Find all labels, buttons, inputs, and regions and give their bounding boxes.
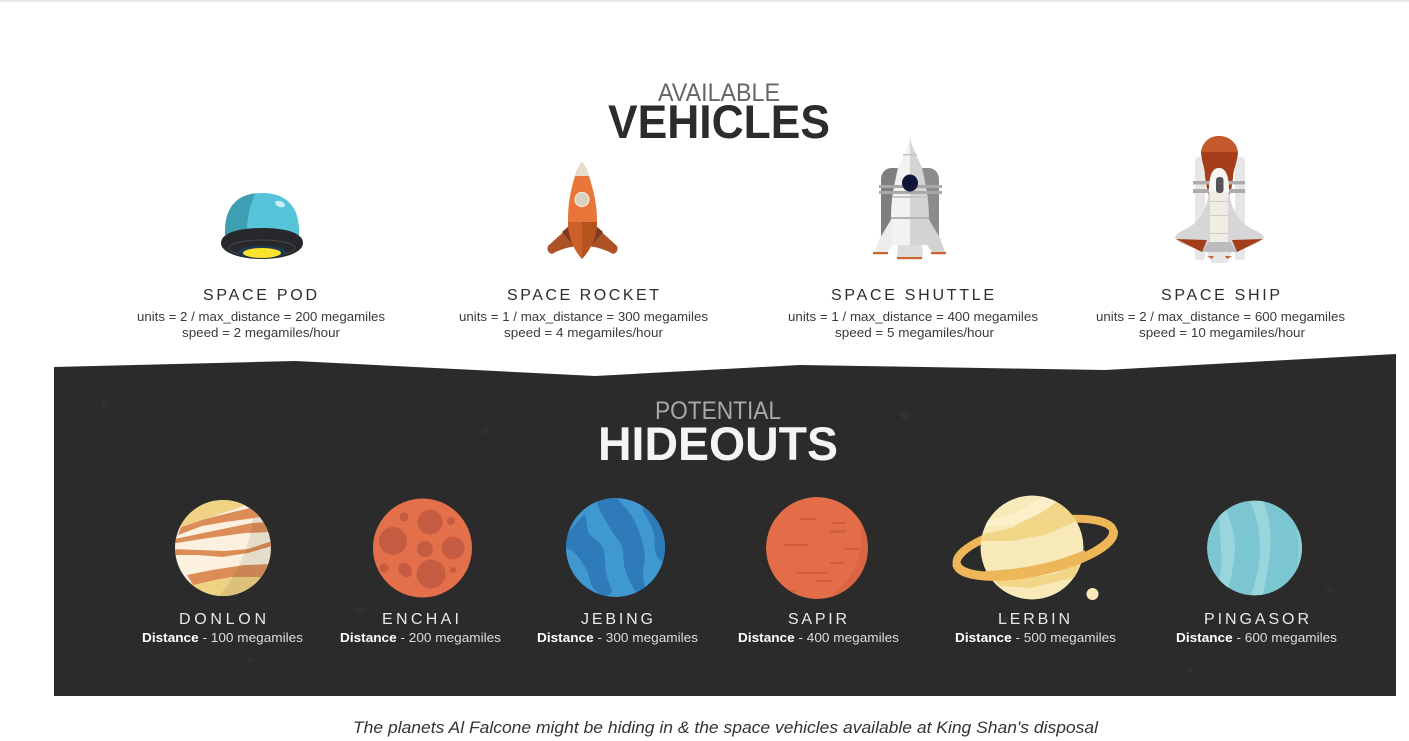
planet name: enchai: ENCHAI [382, 611, 459, 628]
planet distance: sapir: Distance - 400 megamiles [738, 630, 900, 645]
icon: lerbin planet [952, 496, 1118, 600]
vehicle: space pod [137, 190, 385, 340]
planet name: pingasor: PINGASOR [1204, 611, 1309, 628]
caption: The planets Al Falcone might be hiding in & the space vehicles available at King Shan's disposal [353, 718, 1099, 737]
planet name: lerbin: LERBIN [998, 611, 1070, 628]
heading: potential hideouts: POTENTIAL [655, 397, 781, 425]
vehicle specs: space ship: speed = 10 megamiles/hour [1139, 325, 1306, 340]
planet name: sapir: SAPIR [788, 611, 847, 628]
vehicle: space shuttle [788, 138, 1039, 340]
vehicle specs: space shuttle: units = 1 / max_distance = 400 megamiles [788, 309, 1039, 324]
vehicle name: space shuttle: SPACE SHUTTLE [831, 287, 994, 304]
heading: available vehicles: VEHICLES [608, 95, 830, 148]
icon: space pod [220, 190, 303, 259]
planet distance: lerbin: Distance - 500 megamiles [955, 630, 1117, 645]
planet: jebing [537, 496, 699, 645]
vehicle specs: space rocket: speed = 4 megamiles/hour [504, 325, 664, 340]
icon: pingasor planet [1207, 500, 1305, 596]
vehicle specs: space rocket [459, 309, 709, 340]
vehicle name: space pod: SPACE POD [203, 287, 317, 304]
vehicle specs: space shuttle: speed = 5 megamiles/hour [835, 325, 995, 340]
vehicle specs: space shuttle [788, 309, 1039, 340]
heading: potential hideouts: HIDEOUTS [598, 417, 838, 470]
vehicle specs: space pod: speed = 2 megamiles/hour [182, 325, 341, 340]
planet: sapir [738, 497, 900, 645]
planet distance: jebing: Distance - 300 megamiles [537, 630, 699, 645]
planet name: jebing: JEBING [581, 611, 653, 628]
vehicle specs: space ship [1096, 309, 1346, 340]
panel: hideouts [54, 354, 1396, 696]
planet distance: donlon: Distance - 100 megamiles [142, 630, 304, 645]
vehicle: space rocket [459, 162, 709, 340]
vehicle specs: space ship: units = 2 / max_distance = 600 megamiles [1096, 309, 1346, 324]
planet: pingasor [1176, 500, 1338, 645]
vehicle specs: space pod [137, 309, 385, 340]
icon: jebing planet [566, 498, 665, 597]
icon: space ship [1175, 136, 1264, 263]
planet: donlon [142, 498, 304, 645]
planet distance: pingasor: Distance - 600 megamiles [1176, 630, 1338, 645]
vehicle specs: space pod: units = 2 / max_distance = 200 megamiles [137, 309, 385, 324]
planet distance: enchai: Distance - 200 megamiles [340, 630, 502, 645]
vehicle specs: space rocket: units = 1 / max_distance = 300 megamiles [459, 309, 709, 324]
icon: enchai planet [373, 498, 472, 598]
icon: space rocket [548, 162, 618, 259]
vehicle: space ship [1096, 136, 1346, 340]
planet name: donlon: DONLON [179, 611, 266, 628]
planet: lerbin [952, 496, 1118, 645]
icon: sapir planet [766, 497, 870, 600]
icon: space shuttle [873, 138, 946, 259]
vehicle name: space rocket: SPACE ROCKET [507, 287, 659, 304]
heading: available vehicles: AVAILABLE [658, 79, 780, 107]
vehicle name: space ship: SPACE SHIP [1161, 287, 1280, 304]
planet: enchai [340, 498, 502, 645]
icon: donlon planet [175, 500, 271, 596]
